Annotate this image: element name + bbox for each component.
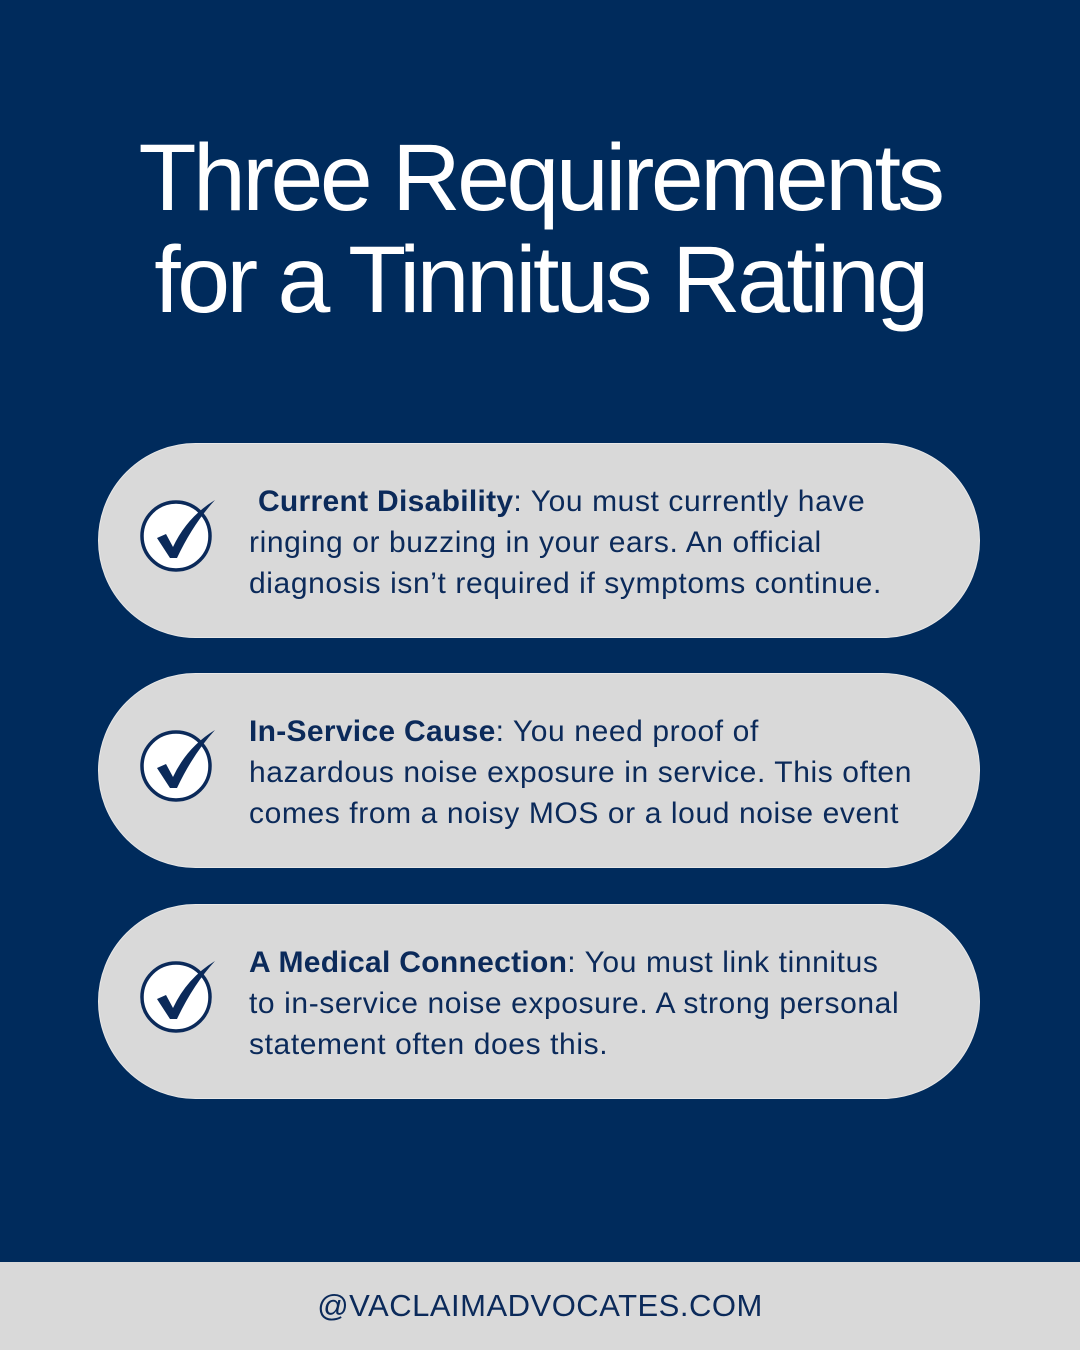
text: current disability: Current Disability: You must currently have bbox=[258, 485, 865, 518]
text: medical connection: to in-service noise exposure. A strong personal bbox=[249, 987, 899, 1020]
icon: check circle bbox=[140, 500, 215, 572]
text: current disability: diagnosis isn’t required if symptoms continue. bbox=[249, 567, 882, 600]
panel: in-service cause bbox=[98, 673, 980, 868]
icon: check circle bbox=[140, 730, 215, 802]
text: current disability bbox=[249, 485, 882, 600]
icon: check circle bbox=[140, 961, 215, 1033]
text: in-service cause: comes from a noisy MOS or a loud noise event bbox=[249, 797, 899, 830]
footer bbox=[0, 1262, 1080, 1350]
title bbox=[139, 125, 942, 333]
title: for a Tinnitus Rating bbox=[154, 227, 926, 333]
text: in-service cause: hazardous noise exposure in service. This often bbox=[249, 756, 912, 789]
panel: current disability bbox=[98, 443, 980, 638]
text: medical connection: statement often does this. bbox=[249, 1028, 608, 1061]
panel: medical connection bbox=[98, 904, 980, 1099]
text: medical connection: A Medical Connection: You must link tinnitus bbox=[249, 946, 878, 979]
text: medical connection bbox=[249, 946, 899, 1061]
footer: @VACLAIMADVOCATES.COM bbox=[317, 1288, 763, 1323]
text: current disability: ringing or buzzing in your ears. An official bbox=[249, 526, 822, 559]
text: in-service cause: In-Service Cause: You need proof of bbox=[249, 715, 759, 748]
text: in-service cause bbox=[249, 715, 912, 830]
title: Three Requirements bbox=[139, 125, 941, 231]
